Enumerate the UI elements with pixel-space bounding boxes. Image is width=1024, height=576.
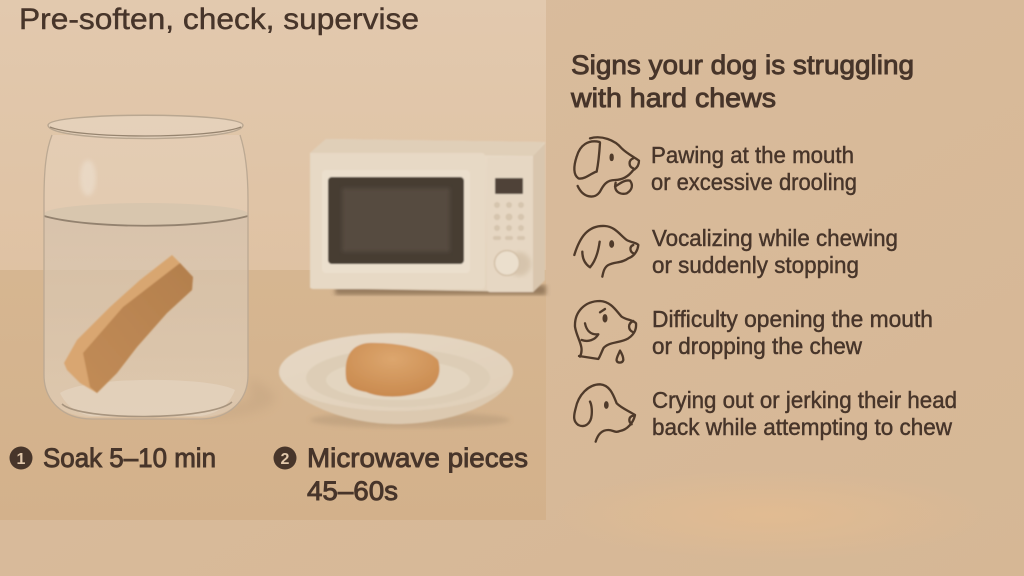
icon: dog head vocalizing — [574, 226, 638, 277]
microwave oven — [310, 139, 546, 295]
table surface — [0, 270, 546, 520]
icon: dog with paw at mouth — [574, 137, 639, 197]
step 1 label — [10, 443, 216, 473]
step 2 text: 45–60s — [307, 476, 398, 506]
sign 3 text: Difficulty opening the mouth — [652, 306, 933, 332]
jar base — [60, 380, 235, 416]
sign 1 text: or excessive drooling — [651, 169, 857, 195]
jar water — [44, 216, 248, 417]
sign 2 text: Vocalizing while chewing — [652, 225, 898, 251]
wall backdrop — [0, 0, 546, 272]
sign 1: pawing — [574, 137, 857, 197]
step 2 text: Microwave pieces — [307, 443, 528, 473]
chew stick — [64, 255, 193, 393]
water glass jar with soaking chew — [44, 115, 275, 420]
panel: photo of softening steps — [0, 0, 546, 520]
sign 2 text: or suddenly stopping — [652, 252, 859, 278]
icon: dog head crying out — [574, 384, 635, 442]
jar outline — [44, 135, 248, 419]
step 1 badge: 1 — [17, 451, 26, 468]
sign 4: crying out — [574, 384, 957, 442]
sign 3: difficulty opening — [575, 301, 933, 363]
soft glow at lower right — [555, 470, 985, 560]
icon: dog with drool drop — [575, 301, 636, 363]
heading: signs: Signs your dog is struggling — [571, 50, 914, 80]
microwave keypad — [493, 202, 525, 240]
step 2 badge — [274, 446, 296, 470]
step 1 text: Soak 5–10 min — [43, 443, 216, 473]
plate with softened chew — [279, 333, 513, 428]
microwave display — [495, 178, 523, 194]
microwave knob — [507, 252, 531, 276]
microwave window — [328, 177, 464, 264]
sign 3 text: or dropping the chew — [652, 333, 862, 359]
sign 2: vocalizing — [574, 225, 898, 278]
sign 4 text: back while attempting to chew — [652, 414, 952, 440]
title: Pre-soften, check, supervise — [19, 3, 419, 36]
jar rim — [48, 115, 243, 138]
step 2 label — [274, 443, 528, 506]
sign 1 text: Pawing at the mouth — [651, 142, 854, 168]
sign 4 text: Crying out or jerking their head — [652, 387, 957, 413]
step 1 badge — [10, 446, 32, 470]
heading: signs: with hard chews — [570, 83, 776, 113]
step 2 badge: 2 — [281, 451, 290, 468]
